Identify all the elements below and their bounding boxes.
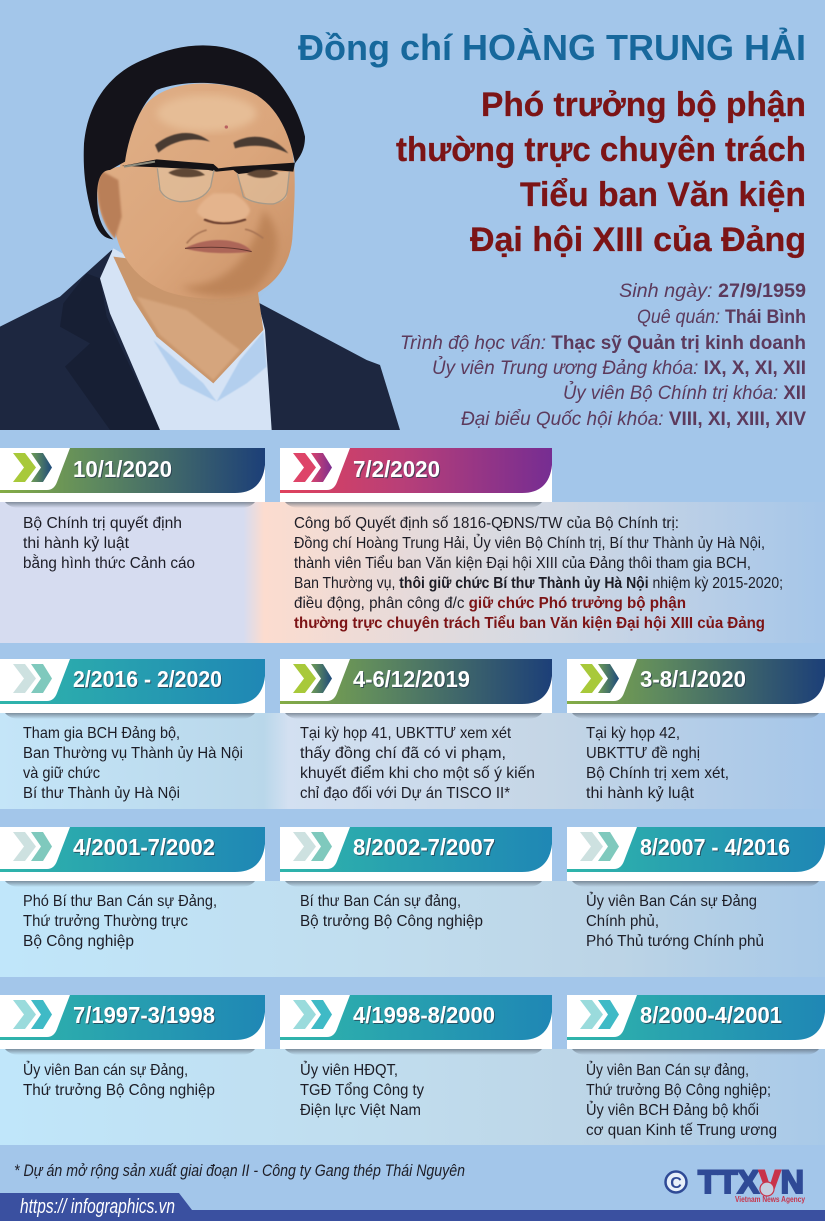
- biography facts: Trình độ học vấn: Thạc sỹ Quản trị kinh doanh: [400, 332, 806, 354]
- biography facts: Quê quán: Thái Bình: [637, 306, 806, 328]
- card header: 2/2016 - 2/2020: [0, 659, 265, 719]
- card header: 8/2000-4/2001: [567, 995, 825, 1055]
- card text: 4/2001-7/2002: [23, 893, 217, 950]
- card header: 4/1998-8/2000: [280, 995, 552, 1055]
- portrait photo of Hoàng Trung Hải: [0, 45, 400, 430]
- card text: 10/1/2020: thi hành kỷ luật: [23, 535, 130, 552]
- nose: [197, 193, 250, 222]
- card text: 7/2/2020: điều động, phân công đ/c giữ chức Phó trưởng bộ phận: [294, 595, 686, 612]
- card text: 4-6/12/2019: khuyết điểm khi cho một số ý kiến: [300, 764, 535, 782]
- card header: 7/1997-3/1998: 7/1997-3/1998: [74, 1003, 216, 1029]
- card header: 8/2002-7/2007: [280, 827, 552, 887]
- subtitle: [396, 86, 806, 259]
- card text: 8/2000-4/2001: Thứ trưởng Bộ Công nghiệp;: [586, 1082, 771, 1099]
- biography facts: Sinh ngày: 27/9/1959: [619, 280, 806, 302]
- card header: 10/1/2020: 10/1/2020: [74, 457, 173, 483]
- subtitle: Phó trưởng bộ phận: [481, 86, 806, 124]
- card text: 4/2001-7/2002: Bộ Công nghiệp: [23, 933, 134, 950]
- card header: 7/2/2020: 7/2/2020: [354, 457, 441, 483]
- card text: 8/2007 - 4/2016: Ủy viên Ban Cán sự Đảng: [586, 891, 757, 910]
- card header: 8/2002-7/2007: 8/2002-7/2007: [353, 834, 495, 860]
- footer bar with URL: [0, 1193, 825, 1221]
- card text: 7/2/2020: thành viên Tiểu ban Văn kiện Đại hội XIII của Đảng thôi tham gia BCH,: [294, 554, 751, 572]
- card header: 8/2000-4/2001: 8/2000-4/2001: [640, 1002, 782, 1028]
- card text: 7/1997-3/1998: Thứ trưởng Bộ Công nghiệp: [23, 1082, 215, 1099]
- card text: 2/2016 - 2/2020: [23, 725, 243, 802]
- card header: 2/2016 - 2/2020: 2/2016 - 2/2020: [74, 667, 223, 693]
- card text: 8/2000-4/2001: cơ quan Kinh tế Trung ương: [586, 1122, 777, 1139]
- card text: 7/1997-3/1998: Ủy viên Ban cán sự Đảng,: [23, 1060, 188, 1079]
- card text: 2/2016 - 2/2020: Ban Thường vụ Thành ủy Hà Nội: [23, 745, 243, 762]
- panel background row 3: [0, 881, 825, 977]
- card text: 7/2/2020: Ban Thường vụ, thôi giữ chức Bí thư Thành ủy Hà Nội nhiệm kỳ 2015-2020;: [294, 575, 783, 592]
- TTXVN logo: [666, 1164, 805, 1204]
- TTXVN logo: C: [670, 1175, 682, 1192]
- face: [97, 84, 295, 299]
- card text: 10/1/2020: bằng hình thức Cảnh cáo: [23, 553, 195, 572]
- card text: 7/2/2020: thường trực chuyên trách Tiểu ban Văn kiện Đại hội XIII của Đảng: [294, 614, 765, 632]
- biography facts: [400, 280, 806, 430]
- card text: 8/2000-4/2001: Ủy viên Ban Cán sự đảng,: [586, 1060, 749, 1079]
- card text: 3-8/1/2020: [586, 725, 729, 802]
- card text: 3-8/1/2020: UBKTTƯ đề nghị: [586, 745, 700, 762]
- card text: 3-8/1/2020: Bộ Chính trị xem xét,: [586, 765, 729, 782]
- card header: 7/2/2020: [280, 448, 552, 508]
- card text: 7/2/2020: [294, 515, 783, 632]
- card header: 8/2000-4/2001: 8/2000-4/2001: [641, 1003, 783, 1029]
- card text: 4/2001-7/2002: Thứ trưởng Thường trực: [23, 913, 188, 930]
- biography facts: Đại biểu Quốc hội khóa: VIII, XI, XIII, XIV: [461, 408, 806, 430]
- card text: 2/2016 - 2/2020: Bí thư Thành ủy Hà Nội: [23, 785, 180, 802]
- card text: 8/2002-7/2007: Bộ trưởng Bộ Công nghiệp: [300, 913, 483, 930]
- subtitle: Đại hội XIII của Đảng: [470, 221, 806, 259]
- card header: 4/1998-8/2000: 4/1998-8/2000: [354, 1003, 496, 1029]
- card header: 4/2001-7/2002: 4/2001-7/2002: [73, 834, 215, 860]
- mouth: [185, 240, 252, 253]
- card text: 7/2/2020: Công bố Quyết định số 1816-QĐNS/TW của Bộ Chính trị:: [294, 515, 679, 532]
- card text: 3-8/1/2020: Tại kỳ họp 42,: [586, 725, 680, 742]
- card text: 3-8/1/2020: thi hành kỷ luật: [586, 785, 695, 802]
- jacket: [0, 250, 400, 430]
- eyebrows: [155, 133, 210, 153]
- hair: [84, 45, 305, 239]
- TTXVN logo: TTXVN: [698, 1164, 804, 1200]
- neck: [113, 257, 263, 383]
- card text: 4-6/12/2019: [300, 725, 535, 802]
- biography facts: Ủy viên Trung ương Đảng khóa: IX, X, XI, XII: [432, 355, 806, 379]
- card header: 8/2007 - 4/2016: 8/2007 - 4/2016: [640, 834, 790, 860]
- card header: 4/1998-8/2000: 4/1998-8/2000: [353, 1002, 495, 1028]
- card header: 4/2001-7/2002: 4/2001-7/2002: [74, 835, 216, 861]
- card text: 2/2016 - 2/2020: và giữ chức: [23, 765, 100, 782]
- card header: 2/2016 - 2/2020: 2/2016 - 2/2020: [73, 666, 222, 692]
- subtitle: thường trực chuyên trách: [396, 131, 806, 169]
- card text: 8/2000-4/2001: [586, 1060, 777, 1139]
- eyes: [168, 168, 205, 177]
- footnote: * Dự án mở rộng sản xuất giai đoạn II - Công ty Gang thép Thái Nguyên: [14, 1162, 465, 1180]
- card text: 8/2007 - 4/2016: Phó Thủ tướng Chính phủ: [586, 933, 764, 950]
- card text: 7/1997-3/1998: [23, 1060, 215, 1099]
- title: Đồng chí HOÀNG TRUNG HẢI: [298, 27, 806, 68]
- card header: 4-6/12/2019: 4-6/12/2019: [354, 667, 471, 693]
- card header: 7/1997-3/1998: [0, 995, 265, 1055]
- card text: 7/2/2020: Đồng chí Hoàng Trung Hải, Ủy viên Bộ Chính trị, Bí thư Thành ủy Hà Nội,: [294, 533, 765, 552]
- subtitle: Tiểu ban Văn kiện: [520, 176, 806, 214]
- TTXVN logo: Vietnam News Agency: [735, 1195, 805, 1204]
- card header: 10/1/2020: 10/1/2020: [73, 456, 172, 482]
- card header: 4-6/12/2019: [280, 659, 552, 719]
- card header: 7/2/2020: 7/2/2020: [353, 456, 440, 482]
- card text: 4/1998-8/2000: [300, 1060, 424, 1119]
- card text: 4-6/12/2019: chỉ đạo đối với Dự án TISCO II*: [300, 785, 510, 802]
- panel background row 2: [0, 713, 825, 809]
- card text: 4-6/12/2019: Tại kỳ họp 41, UBKTTƯ xem xét: [300, 725, 512, 742]
- card header: 8/2007 - 4/2016: 8/2007 - 4/2016: [641, 835, 791, 861]
- footer bar with URL: https:// infographics.vn: [20, 1196, 175, 1218]
- card header: 8/2002-7/2007: 8/2002-7/2007: [354, 835, 496, 861]
- card header: 4/2001-7/2002: [0, 827, 265, 887]
- card text: 8/2000-4/2001: Ủy viên BCH Đảng bộ khối: [586, 1100, 759, 1119]
- card header: 7/1997-3/1998: 7/1997-3/1998: [73, 1002, 215, 1028]
- card text: 8/2002-7/2007: Bí thư Ban Cán sự đảng,: [300, 893, 461, 910]
- card header: 3-8/1/2020: 3-8/1/2020: [640, 666, 746, 692]
- card header: 3-8/1/2020: 3-8/1/2020: [641, 667, 747, 693]
- card text: 8/2002-7/2007: [300, 893, 483, 930]
- card text: 2/2016 - 2/2020: Tham gia BCH Đảng bộ,: [23, 725, 180, 742]
- biography facts: Ủy viên Bộ Chính trị khóa: XII: [563, 380, 806, 404]
- glasses: [122, 159, 295, 204]
- card text: 8/2007 - 4/2016: [586, 891, 764, 950]
- panel background row 4: [0, 1049, 825, 1145]
- card text: 4/1998-8/2000: TGĐ Tổng Công ty: [300, 1081, 424, 1099]
- card text: 4/2001-7/2002: Phó Bí thư Ban Cán sự Đảng,: [23, 893, 217, 910]
- card text: 4-6/12/2019: thấy đồng chí đã có vi phạm,: [300, 745, 506, 762]
- card text: 8/2007 - 4/2016: Chính phủ,: [586, 913, 659, 930]
- card header: 3-8/1/2020: [567, 659, 825, 719]
- card header: 4-6/12/2019: 4-6/12/2019: [353, 666, 470, 692]
- panel background row 1: [0, 502, 825, 643]
- card text: 10/1/2020: [23, 515, 195, 572]
- card text: 4/1998-8/2000: Điện lực Việt Nam: [300, 1102, 421, 1119]
- shirt: [100, 248, 272, 430]
- card text: 4/1998-8/2000: Ủy viên HĐQT,: [300, 1060, 398, 1079]
- card header: 8/2007 - 4/2016: [567, 827, 825, 887]
- card header: 10/1/2020: [0, 448, 265, 508]
- card text: 10/1/2020: Bộ Chính trị quyết định: [23, 515, 182, 532]
